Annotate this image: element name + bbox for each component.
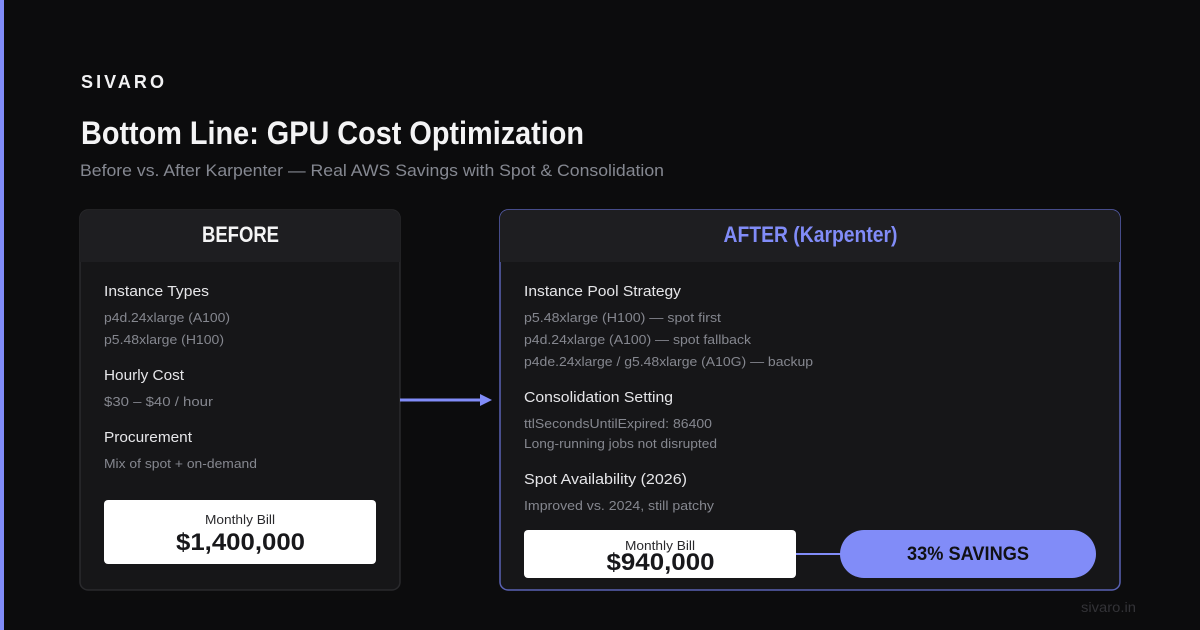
procurement: Procurement [104,429,193,446]
instance pool strategy: p5.48xlarge (H100) — spot first [524,310,721,325]
instance types [104,283,230,347]
consolidation setting [524,389,717,451]
procurement [104,429,257,471]
title: Bottom Line: GPU Cost Optimization [81,115,584,151]
monthly bill before: $1,400,000 [176,529,305,556]
hourly cost: $30 – $40 / hour [104,394,214,409]
savings pill [840,530,1096,578]
monthly bill before: Monthly Bill [205,512,275,527]
monthly bill after [524,530,796,578]
footer url: sivaro.in [1081,599,1136,615]
panel: after [500,210,1120,590]
instance pool strategy: p4de.24xlarge / g5.48xlarge (A10G) — backup [524,354,813,369]
consolidation setting: ttlSecondsUntilExpired: 86400 [524,416,712,431]
instance types: p5.48xlarge (H100) [104,332,224,347]
after header [500,210,1120,262]
monthly bill after: Monthly Bill [625,538,695,553]
monthly bill after: $940,000 [606,549,714,576]
subtitle: Before vs. After Karpenter — Real AWS Savings with Spot & Consolidation [80,161,664,180]
savings pill: 33% SAVINGS [907,544,1029,565]
spot availability: Spot Availability (2026) [524,471,687,488]
consolidation setting: Consolidation Setting [524,389,673,406]
spot availability: Improved vs. 2024, still patchy [524,498,715,513]
before header: BEFORE [202,222,279,247]
connector [796,553,842,555]
before header [80,210,400,262]
brand wordmark: SIVARO [81,72,164,92]
procurement: Mix of spot + on-demand [104,456,257,471]
monthly bill before [104,500,376,564]
instance types: Instance Types [104,283,209,300]
panel: before [80,210,400,590]
arrow [400,394,492,406]
instance types: p4d.24xlarge (A100) [104,310,230,325]
instance pool strategy: p4d.24xlarge (A100) — spot fallback [524,332,752,347]
instance pool strategy [524,283,813,369]
hourly cost: Hourly Cost [104,367,185,384]
consolidation setting: Long-running jobs not disrupted [524,436,717,451]
accent bar [0,0,4,630]
spot availability [524,471,715,513]
after header: AFTER (Karpenter) [724,222,898,247]
hourly cost [104,367,214,409]
instance pool strategy: Instance Pool Strategy [524,283,682,300]
